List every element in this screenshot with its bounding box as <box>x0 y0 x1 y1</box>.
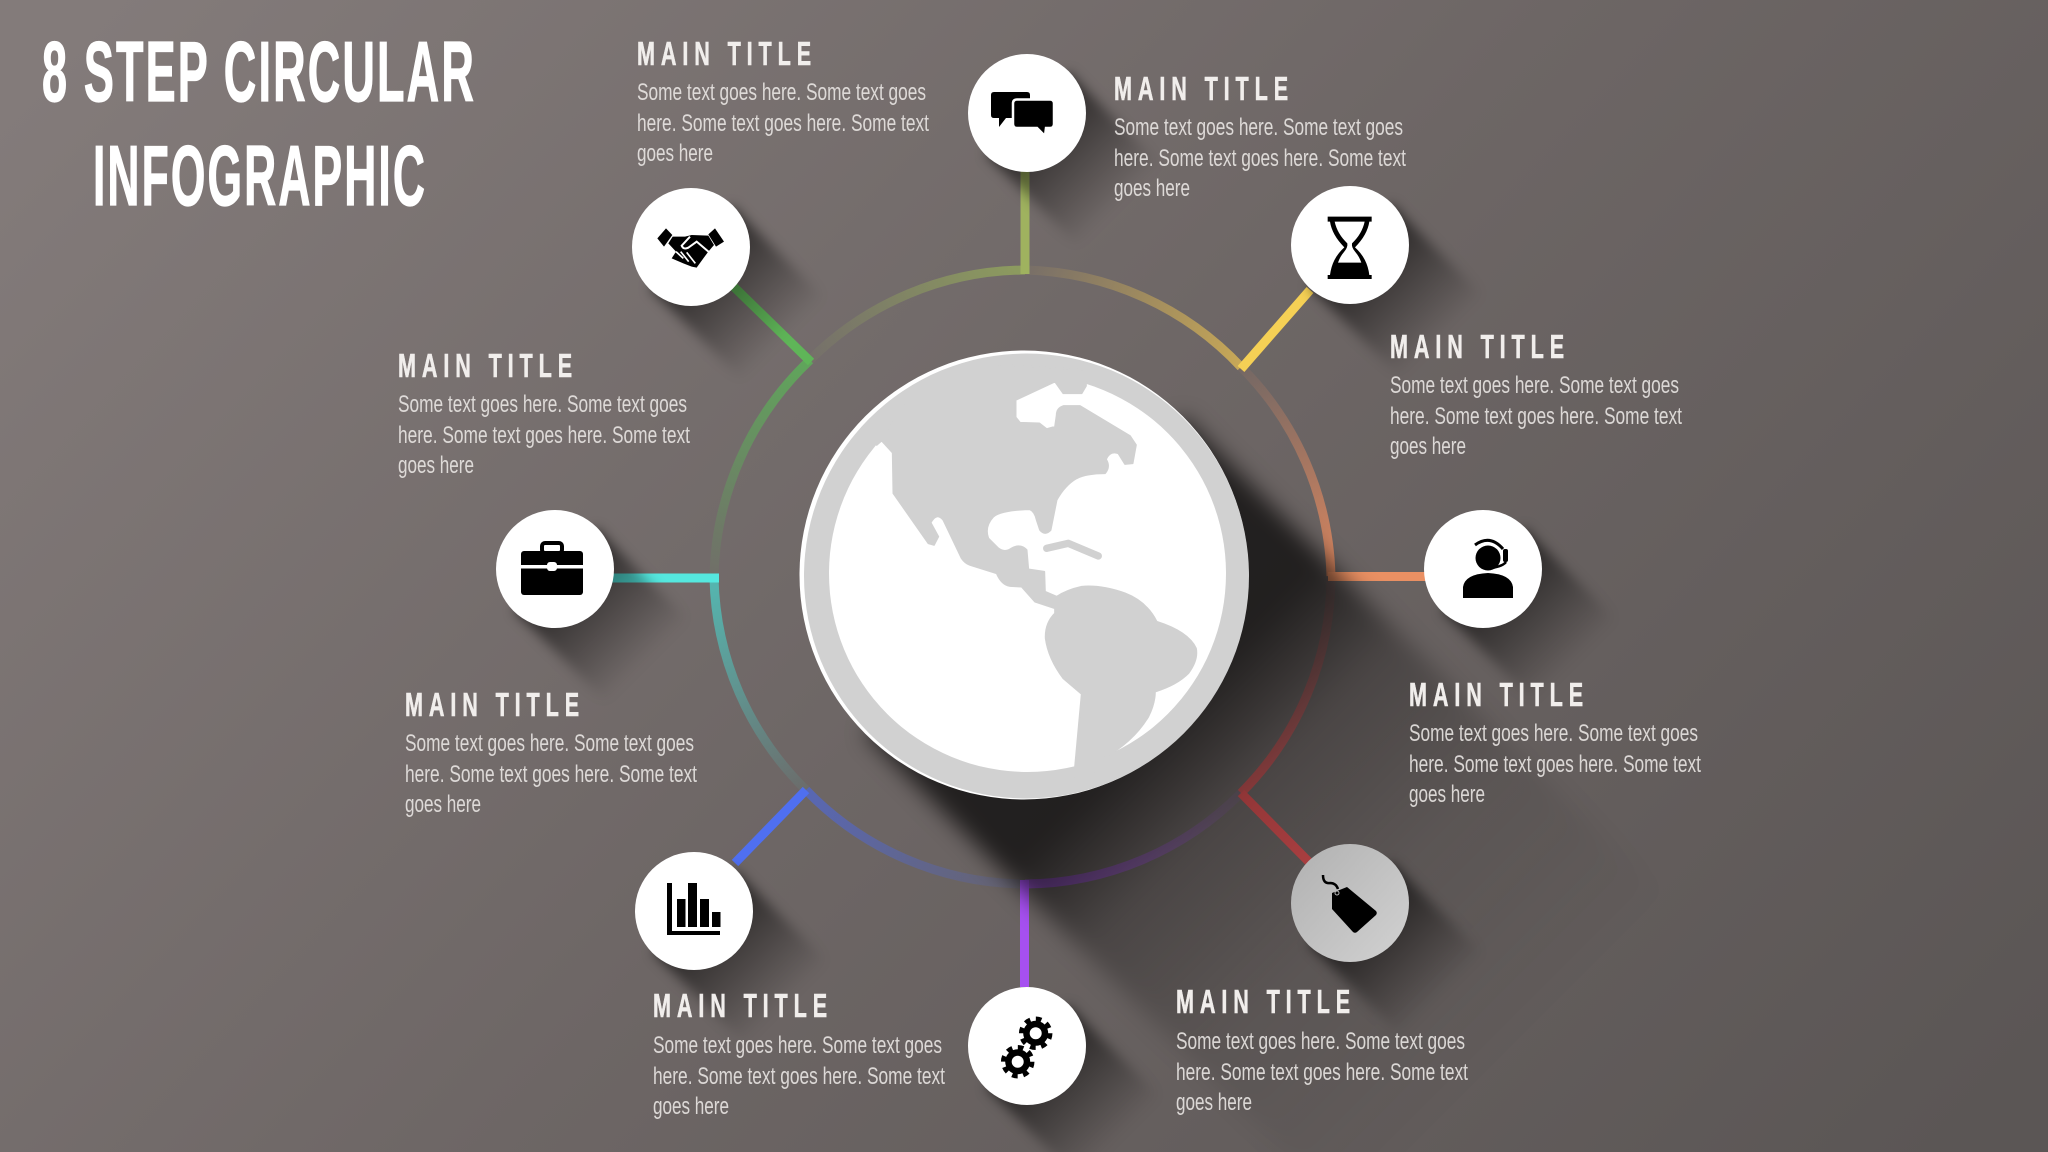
body text: here. Some text goes here. Some text <box>1176 1059 1468 1086</box>
body text <box>1176 1028 1468 1116</box>
text: step bottom right <box>1176 983 1468 1116</box>
icon: headset agent <box>1463 540 1513 598</box>
body text <box>405 730 697 818</box>
icon: handshake <box>657 228 724 268</box>
globe <box>800 350 1249 800</box>
title: INFOGRAPHIC <box>93 129 427 224</box>
text: step upper left <box>637 35 929 167</box>
body text: goes here <box>637 140 713 167</box>
body text: goes here <box>1114 175 1190 202</box>
text: step bottom left <box>653 987 945 1120</box>
node: briefcase <box>496 510 614 628</box>
body text: Some text goes here. Some text goes <box>1176 1028 1465 1055</box>
body text: goes here <box>398 452 474 479</box>
text: step right upper <box>1390 328 1682 460</box>
heading: MAIN TITLE <box>1409 676 1589 713</box>
body text: here. Some text goes here. Some text <box>1114 145 1406 172</box>
body text: goes here <box>1176 1089 1252 1116</box>
node long shadows <box>555 113 1575 1138</box>
icon: hourglass <box>1328 217 1372 279</box>
node: chat <box>968 54 1086 172</box>
body text: goes here <box>1390 433 1466 460</box>
body text: Some text goes here. Some text goes <box>1114 114 1403 141</box>
body text: Some text goes here. Some text goes <box>398 391 687 418</box>
text: step top right <box>1114 70 1406 202</box>
body text: Some text goes here. Some text goes <box>1390 372 1679 399</box>
ring with eight connectors <box>612 170 1426 987</box>
body text: goes here <box>405 791 481 818</box>
body text: Some text goes here. Some text goes <box>1409 720 1698 747</box>
body text <box>1390 372 1682 460</box>
node: handshake <box>632 188 750 306</box>
heading: MAIN TITLE <box>637 35 817 72</box>
node: bar chart <box>635 852 753 970</box>
body text: here. Some text goes here. Some text <box>637 110 929 137</box>
body text <box>398 391 690 479</box>
heading: MAIN TITLE <box>405 686 585 723</box>
body text: goes here <box>1409 781 1485 808</box>
node: hourglass <box>1291 186 1409 304</box>
icon: briefcase <box>521 543 583 595</box>
icon: price tag <box>1323 875 1377 933</box>
body text <box>1114 114 1406 202</box>
icon: gears <box>1004 1019 1050 1076</box>
body text: here. Some text goes here. Some text <box>1409 751 1701 778</box>
heading: MAIN TITLE <box>398 347 578 384</box>
heading: MAIN TITLE <box>1114 70 1294 107</box>
node: tag <box>1291 844 1409 962</box>
body text: Some text goes here. Some text goes <box>405 730 694 757</box>
island <box>1047 543 1098 556</box>
body text: here. Some text goes here. Some text <box>1390 403 1682 430</box>
text: step left upper <box>398 347 690 479</box>
node: gears <box>968 987 1086 1105</box>
globe long shadow <box>1024 575 1560 1111</box>
heading: MAIN TITLE <box>653 987 833 1024</box>
body text: Some text goes here. Some text goes <box>637 79 926 106</box>
body text <box>1409 720 1701 808</box>
body text: here. Some text goes here. Some text <box>398 422 690 449</box>
icon: bar chart <box>667 883 720 935</box>
icon: chat bubbles <box>991 92 1054 136</box>
heading: MAIN TITLE <box>1176 983 1356 1020</box>
title: 8 STEP CIRCULAR <box>42 25 476 120</box>
body text <box>637 79 929 167</box>
heading: MAIN TITLE <box>1390 328 1570 365</box>
continents <box>877 363 1196 777</box>
text: step right lower <box>1409 676 1701 808</box>
body text: here. Some text goes here. Some text <box>653 1063 945 1090</box>
body text: goes here <box>653 1093 729 1120</box>
title <box>42 25 476 224</box>
text: step left lower <box>405 686 697 818</box>
body text <box>653 1032 945 1120</box>
node: headset <box>1424 510 1542 628</box>
body text: Some text goes here. Some text goes <box>653 1032 942 1059</box>
body text: here. Some text goes here. Some text <box>405 761 697 788</box>
